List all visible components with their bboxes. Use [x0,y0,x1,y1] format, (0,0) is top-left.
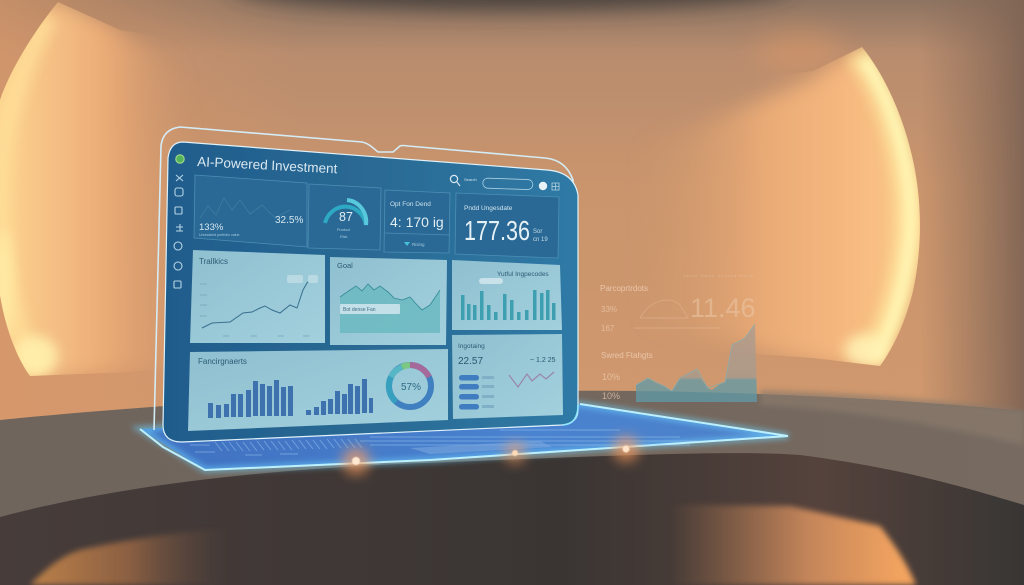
holographic keyboard platform [140,404,788,470]
panel: ingesting list: Ingotaing [458,343,485,350]
panel: ingesting list: ~ 1.2 25 [530,357,556,364]
floating holographic panel: 33% [601,305,617,314]
panel: forecast bar chart with donut: Fancirgnaerts [198,357,247,366]
right wall light [687,47,920,366]
floating holographic panel: 10% [602,391,620,401]
title: AI-Powered Investment [197,154,338,176]
KPI panel: total value [455,193,559,258]
KPI panel: total value: cn 19 [533,237,548,243]
KPI panel: performance [194,175,307,247]
search bar [450,175,559,190]
KPI panel: total value: 177.36 [464,215,530,246]
KPI panel: total value: Sor [533,229,542,235]
KPI panel: gauge [308,184,381,250]
panel: ingesting list: 22.57 [458,356,483,367]
hologram text: Parcoprtrdots [600,284,648,293]
left wall light [0,2,160,376]
KPI panel: fund: Rising [412,242,425,247]
hologram line chart [634,300,720,328]
hologram header: Value Ratio Scored Ratio [683,273,754,278]
floor bands [0,390,1024,585]
floating holographic panel: Swred Ftahgts [601,351,653,360]
keyboard keys [190,430,700,455]
panel: goal area chart: Goal [337,261,353,270]
KPI panel: performance: 133% [199,222,224,233]
KPI panel: gauge: Risk [340,235,347,239]
outer tablet outline [154,127,576,430]
trackpad [410,441,552,454]
panel: traffic line chart [190,250,325,343]
KPI panel: gauge: Product [337,228,351,232]
corner glow of screen [563,405,578,425]
platform glow lights [342,436,639,475]
floating holographic panel [600,273,757,402]
KPI panel: performance: 32.5% [275,215,303,226]
hologram area chart [636,324,757,402]
search bar: Search [464,177,477,182]
panel: forecast bar chart with donut: 57% [401,382,421,393]
KPI panel: gauge: 87 [339,210,353,224]
panel: goal area chart [330,257,447,345]
panel: ingesting list [452,334,563,419]
panel: bar chart top right [452,260,562,330]
floor reflections [30,505,916,585]
KPI panel: performance: Unrealized portfolio value [199,233,240,237]
KPI panel: fund [384,190,450,253]
panel: forecast bar chart with donut [188,349,448,431]
dashboard screen [163,142,578,442]
donut chart [389,365,431,407]
KPI panel: fund: 4: 170 ig [390,214,444,230]
KPI panel: total value: Pndd Ungesdate [464,205,513,212]
panel: bar chart top right: Yutful Ingpecodes [497,271,549,278]
hologram value: 11.46 [690,293,756,323]
floating holographic panel: 167 [601,324,615,333]
sidebar icons [174,155,184,288]
KPI panel: fund: Opt Fon Dend [390,201,431,208]
panel: goal area chart: Bot dense Fan [343,307,376,313]
floating holographic panel: 10% [602,372,620,382]
panel: traffic line chart: Trallkics [199,257,228,266]
